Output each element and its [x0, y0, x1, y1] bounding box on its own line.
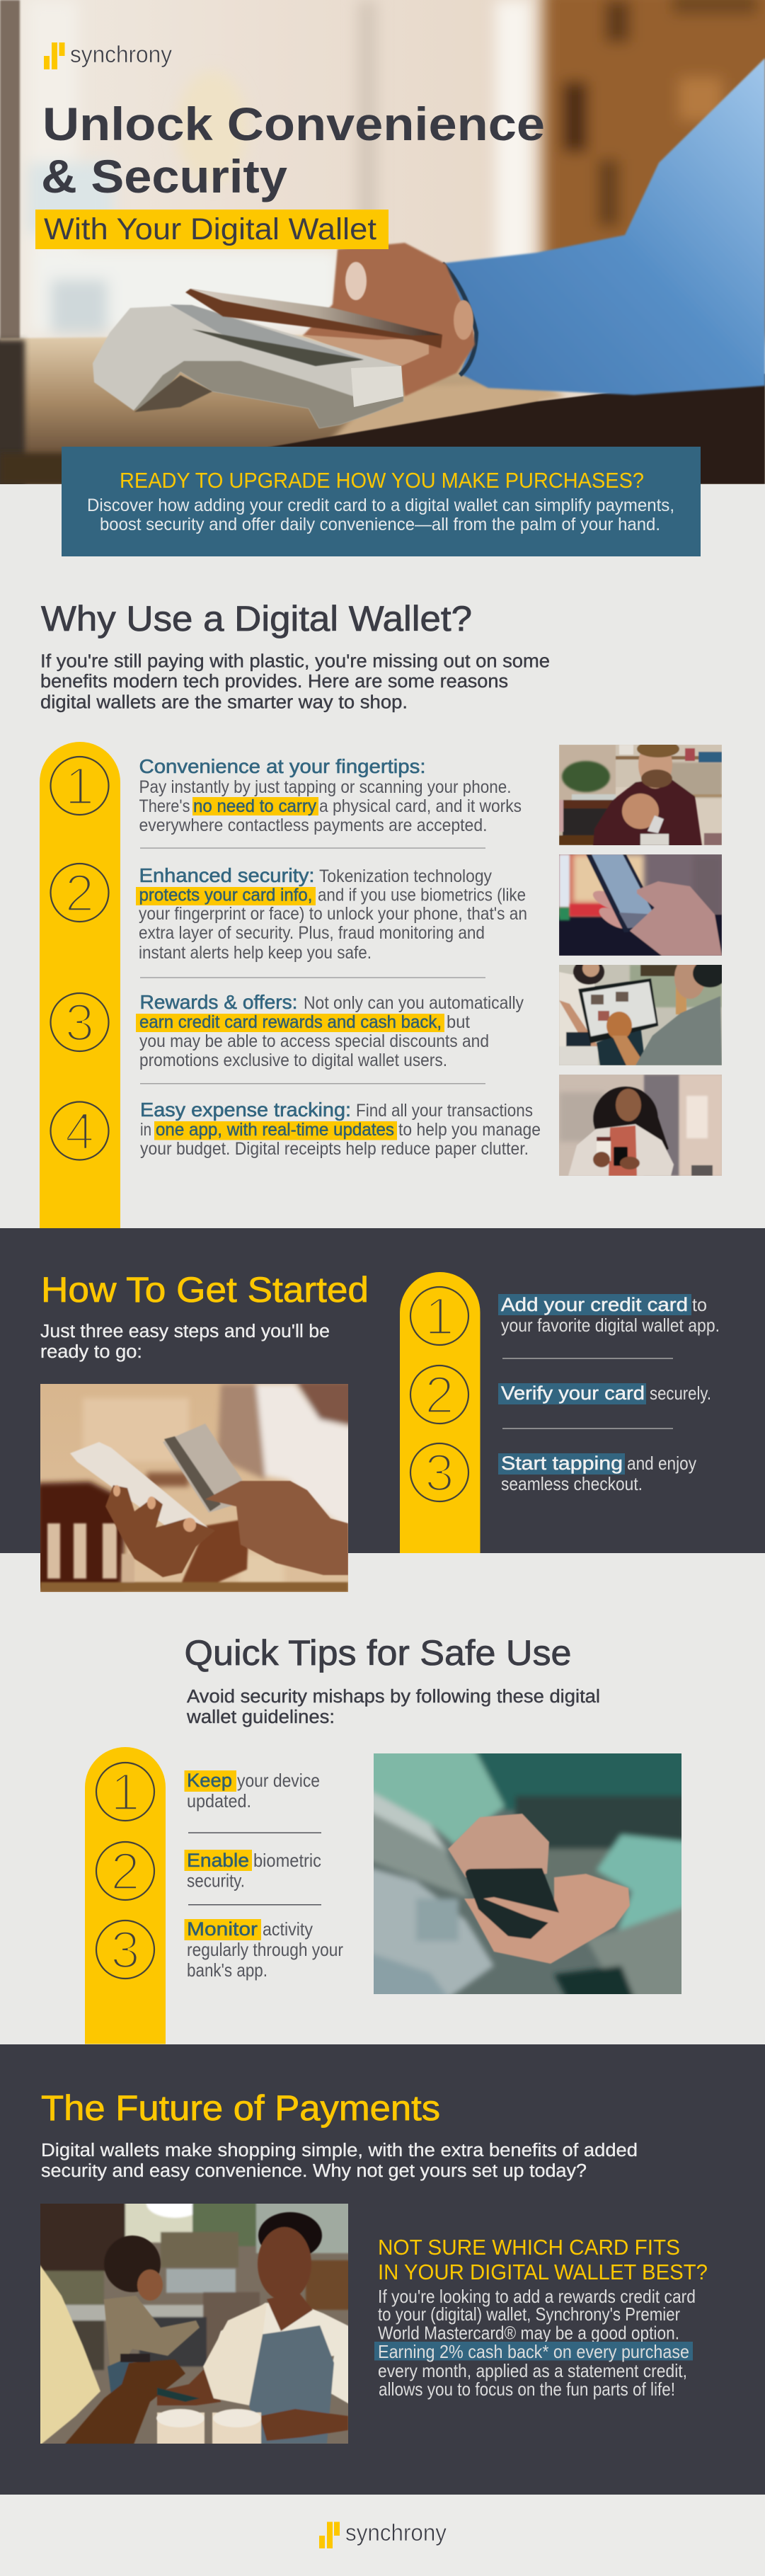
intro text: security and easy convenience. Why not get yours set up today? — [41, 2161, 587, 2181]
item: easy expense tracking: Find all your transactions — [356, 1101, 533, 1121]
intro text — [40, 1322, 330, 1362]
section: why use a digital wallet — [40, 599, 727, 1228]
callout: card recommendation — [374, 2235, 708, 2400]
callout: card recommendation: IN YOUR DIGITAL WALLET BEST? — [378, 2260, 708, 2284]
step 3: Start tapping — [501, 1453, 623, 1474]
photo: person using phone in teal sweater — [374, 1753, 681, 1994]
number 3 — [96, 1920, 154, 1979]
number 2: 2 — [65, 864, 94, 922]
callout: card recommendation: If you're looking to add a rewards credit card — [378, 2286, 696, 2307]
callout: card recommendation: every month, applied as a statement credit, — [378, 2360, 687, 2381]
tip 3: bank's app. — [187, 1959, 268, 1981]
item: enhanced security: instant alerts help keep you safe. — [139, 943, 372, 963]
callout: card recommendation: to your (digital) wallet, Synchrony's Premier — [378, 2303, 680, 2325]
photo: man with smartwatch payment — [559, 745, 722, 845]
intro text — [41, 2141, 638, 2181]
number 1: 1 — [65, 757, 94, 815]
number 1: 1 — [110, 1763, 140, 1821]
yellow number pill — [40, 742, 120, 1228]
number 2: 2 — [110, 1842, 140, 1901]
item: rewards and offers: earn credit card rewards and cash back, — [139, 1012, 442, 1032]
intro text: digital wallets are the smarter way to shop. — [40, 692, 408, 712]
item: easy expense tracking: your budget. Digital receipts help reduce paper clutter. — [140, 1139, 529, 1159]
step 2: securely. — [650, 1383, 711, 1404]
number 1 — [410, 1287, 468, 1346]
tip 1: updated. — [187, 1790, 251, 1811]
tip 2 — [184, 1850, 321, 1891]
number 2 — [51, 864, 109, 922]
photo: hand using phone — [559, 854, 722, 956]
logo: synchrony: synchrony — [345, 2519, 447, 2546]
item: enhanced security: protects your card info, — [139, 885, 313, 905]
number 1 — [96, 1763, 154, 1821]
title: & Security — [41, 150, 287, 202]
tip 3: activity — [263, 1918, 313, 1940]
intro callout panel: READY TO UPGRADE HOW YOU MAKE PURCHASES? — [120, 468, 644, 493]
step 3: and enjoy — [627, 1453, 696, 1474]
intro text: Just three easy steps and you'll be — [40, 1322, 330, 1341]
intro text: benefits modern tech provides. Here are some reasons — [40, 672, 508, 692]
item: easy expense tracking: one app, with real-time updates — [156, 1120, 394, 1140]
heading: Quick Tips for Safe Use — [184, 1633, 572, 1673]
number 1: 1 — [425, 1287, 454, 1346]
item: enhanced security: extra layer of security. Plus, fraud monitoring and — [139, 923, 485, 943]
item: rewards and offers: promotions exclusive to digital wallet users. — [139, 1051, 447, 1070]
step 1 — [498, 1294, 720, 1336]
logo: synchrony: synchrony — [70, 41, 172, 67]
item: convenience: a physical card, and it works — [319, 796, 522, 816]
hero photo: hand tapping phone on payment terminal — [0, 0, 765, 484]
number 1 — [51, 757, 109, 815]
item: rewards and offers — [136, 991, 524, 1070]
number 3 — [51, 993, 109, 1052]
section: how to get started — [0, 1228, 765, 1592]
item: easy expense tracking: Easy expense tracking: — [140, 1099, 351, 1121]
section: quick tips for safe use — [85, 1633, 692, 2044]
callout: card recommendation: World Mastercard® may be a good option. — [378, 2322, 679, 2343]
tip 2: security. — [187, 1870, 245, 1891]
tip 2: biometric — [253, 1850, 321, 1871]
step 1: your favorite digital wallet app. — [501, 1315, 720, 1336]
item: convenience — [139, 755, 522, 835]
tip 1: Keep — [187, 1770, 232, 1791]
subtitle banner: With Your Digital Wallet — [44, 212, 376, 246]
intro text: ready to go: — [40, 1342, 142, 1362]
heading: The Future of Payments — [41, 2088, 440, 2128]
item: rewards and offers: Not only can you automatically — [304, 993, 524, 1013]
logo: synchrony — [319, 2519, 447, 2548]
section: the future of payments — [0, 2044, 765, 2495]
hero section — [0, 0, 765, 556]
step 2 — [498, 1383, 711, 1404]
title: Unlock Convenience — [42, 98, 545, 150]
step 3 — [498, 1453, 696, 1494]
footer — [0, 2495, 765, 2576]
photo: hands holding phone and credit card — [40, 1384, 348, 1592]
intro text: Digital wallets make shopping simple, with the extra benefits of added — [41, 2141, 638, 2160]
tip 1: your device — [237, 1770, 320, 1791]
item: convenience: Convenience at your fingertips: — [139, 755, 426, 777]
item: enhanced security — [136, 864, 527, 963]
number 2 — [96, 1842, 154, 1901]
intro text: wallet guidelines: — [186, 1707, 335, 1727]
step 2: Verify your card — [501, 1383, 645, 1404]
intro text: If you're still paying with plastic, you're missing out on some — [40, 651, 550, 671]
item: rewards and offers: but — [447, 1012, 470, 1032]
intro text — [186, 1687, 600, 1727]
photo: barista taking contactless payment — [40, 2204, 348, 2444]
item: enhanced security: Enhanced security: — [139, 864, 314, 886]
heading: How To Get Started — [41, 1270, 369, 1310]
photo: customer ordering on tablet — [559, 965, 722, 1065]
number 4 — [51, 1101, 109, 1161]
intro text — [40, 651, 550, 712]
photo: woman with coffee and phone — [559, 1075, 722, 1176]
item: convenience: everywhere contactless payments are accepted. — [139, 815, 487, 835]
heading: Why Use a Digital Wallet? — [41, 599, 472, 639]
callout: card recommendation: allows you to focus on the fun parts of life! — [379, 2378, 675, 2400]
item: rewards and offers: you may be able to access special discounts and — [139, 1031, 489, 1051]
title — [41, 98, 545, 202]
item: enhanced security: your fingerprint or face) to unlock your phone, that's an — [139, 904, 527, 924]
item: convenience: no need to carry — [193, 796, 316, 816]
number 2 — [410, 1366, 468, 1424]
dark background band — [0, 1228, 765, 1553]
number 3: 3 — [65, 993, 94, 1052]
tip 3: Monitor — [187, 1918, 258, 1940]
step 3: seamless checkout. — [501, 1473, 643, 1494]
intro callout panel: boost security and offer daily convenience—all from the palm of your hand. — [100, 515, 660, 534]
number 4: 4 — [65, 1101, 94, 1161]
callout: card recommendation: NOT SURE WHICH CARD FITS — [378, 2235, 680, 2260]
tip 3: regularly through your — [187, 1939, 343, 1960]
tip 3 — [184, 1918, 343, 1981]
item: convenience: There's — [139, 796, 190, 816]
yellow number pill — [400, 1272, 480, 1553]
number 3 — [410, 1443, 468, 1502]
number 2: 2 — [425, 1366, 454, 1424]
yellow number pill — [85, 1747, 166, 2044]
item: rewards and offers: Rewards & offers: — [140, 991, 297, 1013]
item: easy expense tracking: to help you manage — [398, 1120, 541, 1140]
tip 2: Enable — [187, 1850, 249, 1871]
tip 1 — [184, 1770, 320, 1811]
item: enhanced security: Tokenization technology — [319, 866, 492, 886]
intro callout panel — [62, 447, 701, 556]
number 3: 3 — [425, 1443, 454, 1502]
item: enhanced security: and if you use biometrics (like — [318, 885, 526, 905]
step 1: to — [692, 1294, 707, 1315]
item: easy expense tracking — [140, 1099, 541, 1159]
number 3: 3 — [110, 1920, 140, 1979]
step 1: Add your credit card — [501, 1294, 688, 1315]
dark background band — [0, 2044, 765, 2495]
intro callout panel: Discover how adding your credit card to a digital wallet can simplify payments, — [87, 496, 674, 515]
intro text: Avoid security mishaps by following these digital — [187, 1687, 600, 1707]
callout: card recommendation: Earning 2% cash back* on every purchase — [378, 2341, 689, 2362]
item: easy expense tracking: in — [140, 1120, 151, 1140]
item: convenience: Pay instantly by just tapping or scanning your phone. — [139, 777, 511, 797]
